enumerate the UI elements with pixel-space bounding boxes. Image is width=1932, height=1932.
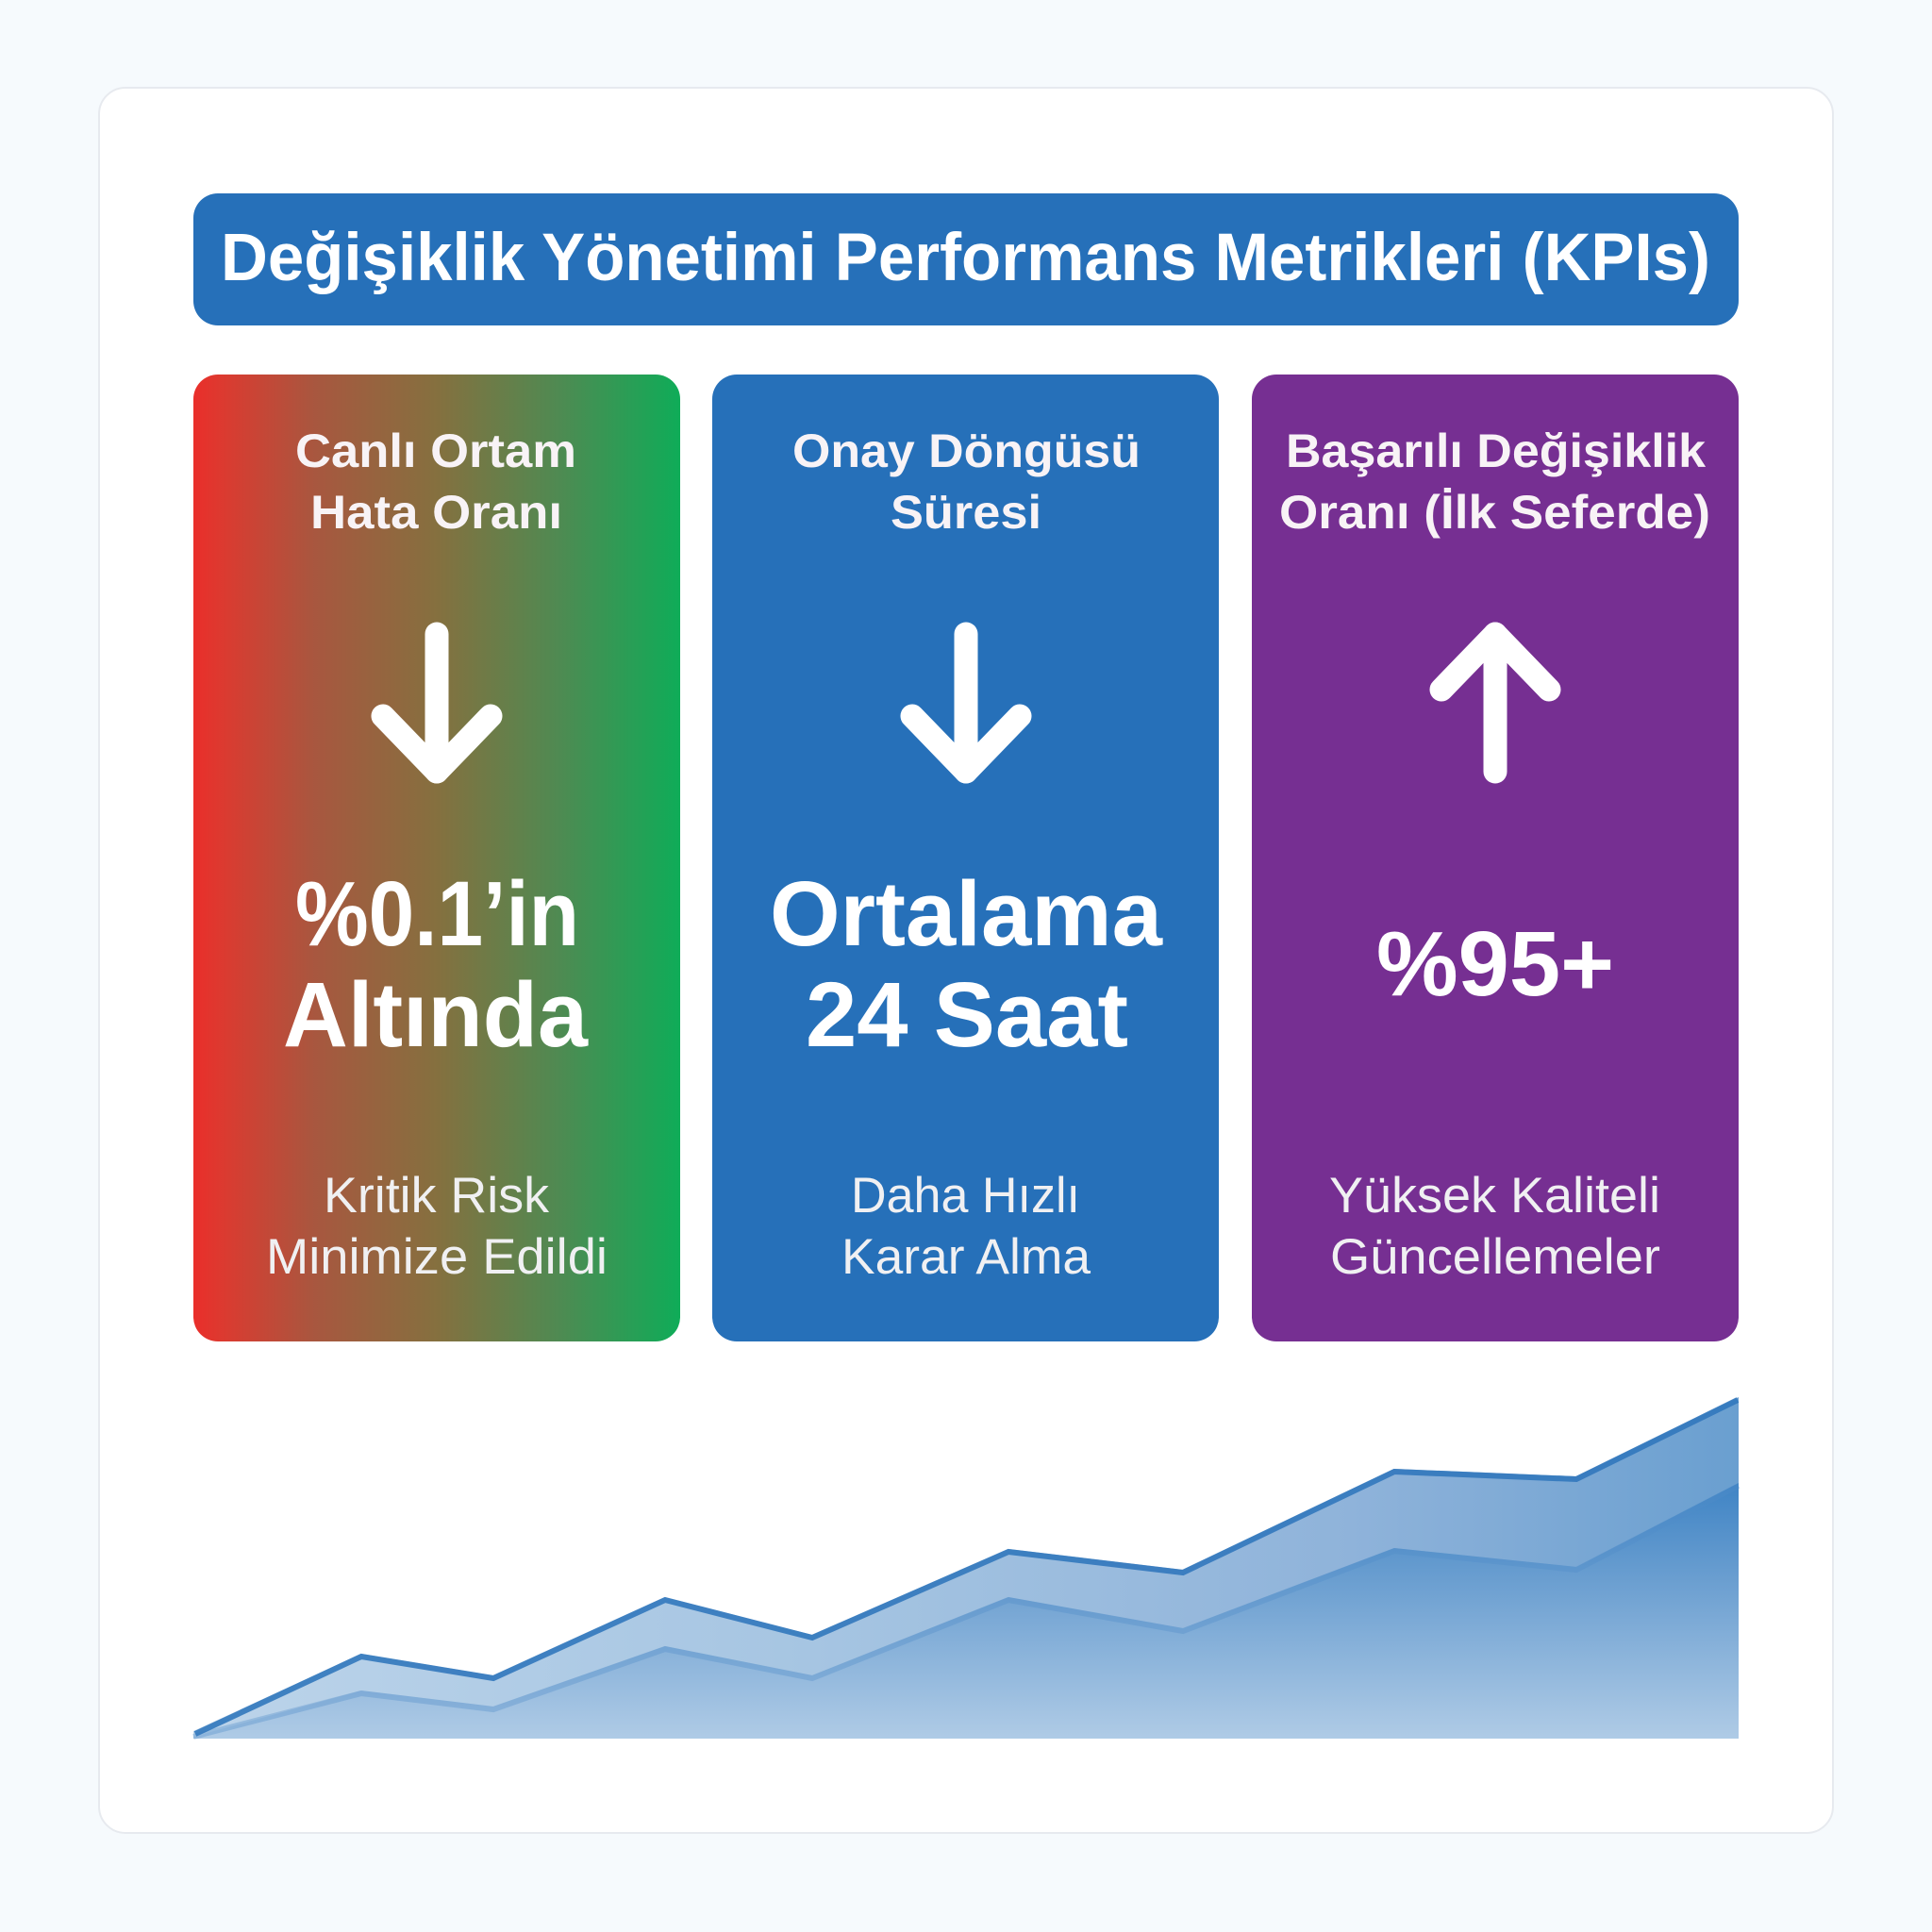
- caption: high quality updates: [1329, 1168, 1660, 1285]
- caption: faster decisions: Daha Hızlı: [851, 1168, 1080, 1224]
- heading: error rate: Hata Oranı: [310, 486, 562, 539]
- heading: error rate: [295, 425, 576, 539]
- caption: faster decisions: Karar Alma: [841, 1229, 1091, 1285]
- value: under 0.1 percent: %0.1’in: [295, 862, 579, 965]
- area chart: rising trend: [193, 1397, 1739, 1739]
- heading: approval cycle: [792, 425, 1141, 539]
- heading: error rate: Canlı Ortam: [295, 425, 576, 477]
- caption: critical risk: Kritik Risk: [324, 1168, 549, 1224]
- heading: success rate: Oranı (İlk Seferde): [1279, 486, 1710, 539]
- caption: high quality updates: Yüksek Kaliteli: [1329, 1168, 1660, 1224]
- heading: success rate: [1279, 425, 1710, 539]
- caption: critical risk: [266, 1168, 608, 1285]
- heading: approval cycle: Süresi: [891, 486, 1041, 539]
- caption: high quality updates: Güncellemeler: [1330, 1229, 1660, 1285]
- value: average 24 hours: Ortalama: [770, 862, 1163, 965]
- value: average 24 hours: [770, 862, 1163, 1066]
- title banner: [193, 193, 1739, 325]
- caption: faster decisions: [841, 1168, 1091, 1285]
- panel: success rate: [1252, 375, 1739, 1341]
- value: average 24 hours: 24 Saat: [806, 963, 1128, 1066]
- heading: success rate: Başarılı Değişiklik: [1286, 425, 1706, 477]
- value: 95 percent plus: %95+: [1376, 912, 1614, 1015]
- heading: approval cycle: Onay Döngüsü: [792, 425, 1141, 477]
- value: under 0.1 percent: [283, 862, 589, 1066]
- panel: approval cycle: [712, 375, 1219, 1341]
- value: under 0.1 percent: Altında: [283, 963, 589, 1066]
- icon: down arrow: [383, 634, 491, 772]
- icon: down arrow: [912, 634, 1020, 772]
- caption: critical risk: Minimize Edildi: [266, 1229, 608, 1285]
- icon: up arrow: [1441, 634, 1549, 772]
- panel: error rate: [193, 375, 680, 1341]
- title: Değişiklik Yönetimi Performans Metrikleri (KPIs): [221, 221, 1710, 295]
